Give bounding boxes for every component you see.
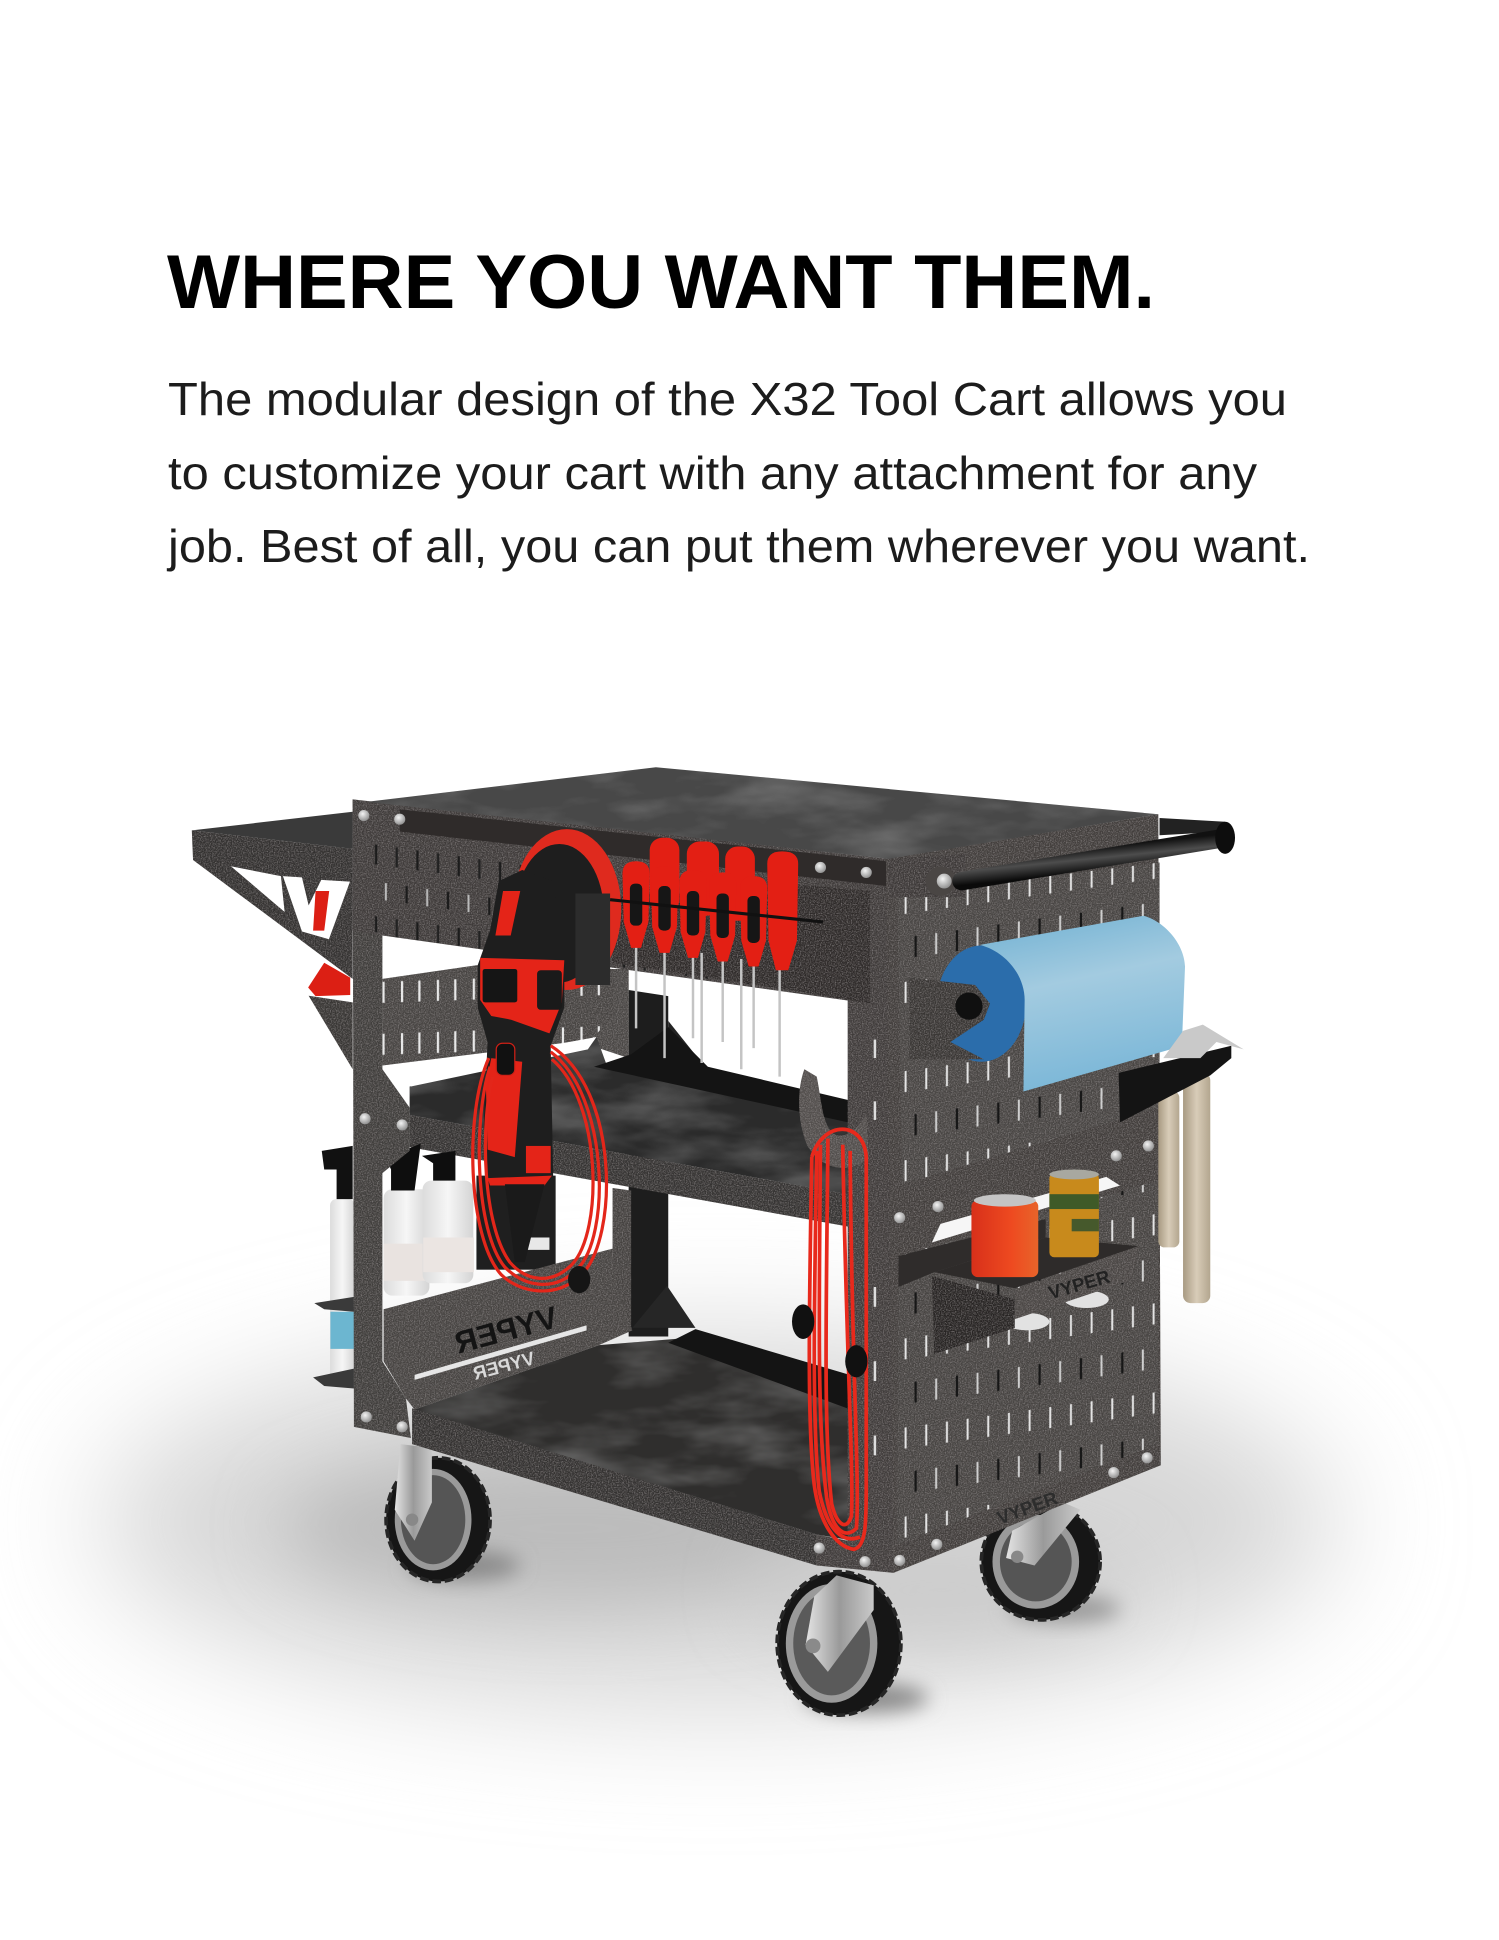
mirrored logo lower: VYPER <box>470 1347 537 1384</box>
logo on end panel: VYPER <box>994 1487 1061 1528</box>
middle shelf <box>400 1027 854 1228</box>
title: WHERE YOU WANT THEM. <box>167 240 1155 325</box>
screwdrivers <box>610 838 823 1077</box>
upper long face with pegboard <box>353 799 889 1005</box>
paper roll <box>910 916 1185 1091</box>
screwdriver blades <box>636 940 780 1077</box>
white gap behind cans <box>932 1177 1120 1242</box>
rear wheel left <box>386 1444 490 1582</box>
bottle one <box>322 1146 355 1380</box>
rear row handles <box>650 838 755 921</box>
orbital polisher disc <box>512 829 621 990</box>
shelf bracket <box>192 830 353 979</box>
tool cart illustration <box>99 767 1336 1715</box>
lower end pegboard <box>897 1181 1158 1544</box>
front row handles <box>622 851 798 970</box>
left corner post <box>353 799 411 1438</box>
spray bottles <box>313 1143 556 1388</box>
bottle two <box>384 1143 429 1296</box>
holder right face <box>1015 1246 1138 1319</box>
body text: to customize your cart with any attachment for any <box>168 447 1257 499</box>
bottle holder rings <box>313 1297 354 1388</box>
rear wheel right <box>981 1502 1100 1620</box>
front corner post <box>817 996 893 1573</box>
body text: job. Best of all, you can put them wherever you want. <box>166 520 1310 572</box>
shelf top <box>192 812 353 849</box>
paper sheet <box>980 916 1185 1091</box>
body text: The modular design of the X32 Tool Cart allows you <box>168 373 1287 425</box>
bottom shelf <box>412 1329 854 1565</box>
bottle three <box>422 1151 474 1283</box>
lower end panel with logo <box>384 1249 632 1410</box>
holder logo: VYPER <box>1046 1266 1113 1303</box>
hammer rack <box>1119 1046 1231 1122</box>
yellow drink can <box>1049 1169 1099 1257</box>
hammer rack and hammers <box>1119 1025 1244 1303</box>
end face frame <box>886 814 1161 1573</box>
holder back plate <box>898 1219 1046 1287</box>
rear pegboard panel <box>382 965 614 1065</box>
body text <box>166 373 1310 572</box>
floor shadow <box>99 1336 1336 1713</box>
cart top surface <box>366 767 1158 859</box>
push handle <box>889 818 1235 897</box>
hammer handles <box>1158 1091 1179 1247</box>
dark paint can <box>476 1176 556 1270</box>
cup bottoms <box>1005 1313 1049 1330</box>
mirrored logo upper: VYPER <box>451 1300 561 1360</box>
polisher body <box>478 870 564 1262</box>
rack rail <box>610 900 823 922</box>
front wheel <box>777 1572 901 1715</box>
fold-out side shelf <box>192 812 353 1069</box>
can holder <box>898 1169 1138 1354</box>
holder left face <box>932 1276 1015 1354</box>
red clamp behind bracket <box>308 891 350 996</box>
lower small bracket <box>309 996 353 1069</box>
hook <box>799 1069 869 1168</box>
screwdriver rack bracket <box>613 885 870 1004</box>
frame bolts <box>358 810 1154 1567</box>
holder knob <box>955 992 983 1020</box>
hammer head <box>1163 1025 1244 1058</box>
polisher red cord <box>473 1046 606 1291</box>
polisher plug <box>568 1266 590 1293</box>
black cord plugs <box>792 1304 867 1377</box>
holder bracket <box>910 978 990 1059</box>
holder top <box>934 1238 1138 1288</box>
upper end pegboard <box>897 863 1160 1184</box>
red drink can <box>971 1194 1038 1277</box>
hanging red cord <box>809 1129 866 1549</box>
handle grips <box>630 884 760 943</box>
roll end <box>937 945 1026 1062</box>
back post <box>587 969 708 1336</box>
